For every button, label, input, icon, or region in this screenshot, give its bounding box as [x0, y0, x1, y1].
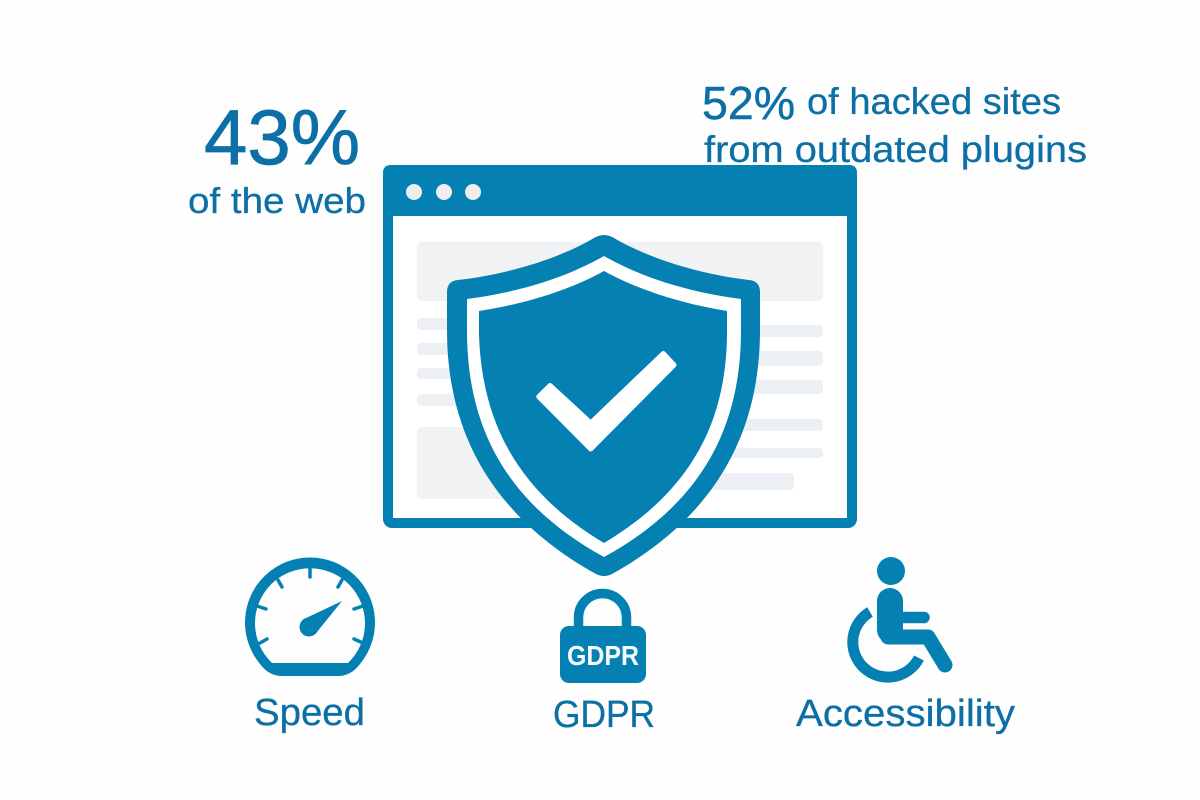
page content placeholders [417, 242, 823, 499]
stat: 52% of hacked sites from outdated plugins: of hacked sites [807, 81, 1061, 122]
stat: 43% of the web: 43% [204, 93, 360, 181]
window frame [388, 170, 852, 523]
head [877, 557, 905, 585]
shield outer [447, 235, 760, 576]
lock body [560, 626, 646, 683]
lock text: GDPR [567, 640, 639, 671]
icon: GDPR padlock [560, 594, 646, 683]
thigh and leg [888, 637, 945, 665]
check mark [539, 354, 674, 449]
shield with check mark [447, 235, 760, 576]
stat: 52% of hacked sites from outdated plugins: from outdated plugins [704, 129, 1087, 170]
gauge needle [300, 601, 342, 636]
label: Accessibility: Accessibility [796, 693, 1015, 735]
title bar [383, 165, 857, 216]
torso [877, 601, 903, 630]
stat: 52% of hacked sites from outdated plugins: 52% [702, 77, 795, 129]
shield white ring [467, 256, 741, 557]
icon: speedometer [245, 557, 375, 676]
wheel [853, 612, 919, 677]
window control dots [406, 184, 481, 200]
icon: wheelchair accessibility [853, 557, 945, 677]
shield inner [479, 271, 727, 543]
label: GDPR: GDPR [553, 694, 655, 736]
stat: 52% of hacked sites from outdated plugins [702, 77, 1087, 170]
gauge body [245, 557, 375, 676]
stat: 43% of the web: of the web [188, 180, 366, 221]
shackle [578, 594, 626, 630]
gauge ticks [257, 568, 363, 643]
stat: 43% of the web [188, 93, 366, 221]
arm [895, 612, 924, 623]
browser window [383, 165, 857, 523]
label: Speed: Speed [254, 692, 365, 734]
